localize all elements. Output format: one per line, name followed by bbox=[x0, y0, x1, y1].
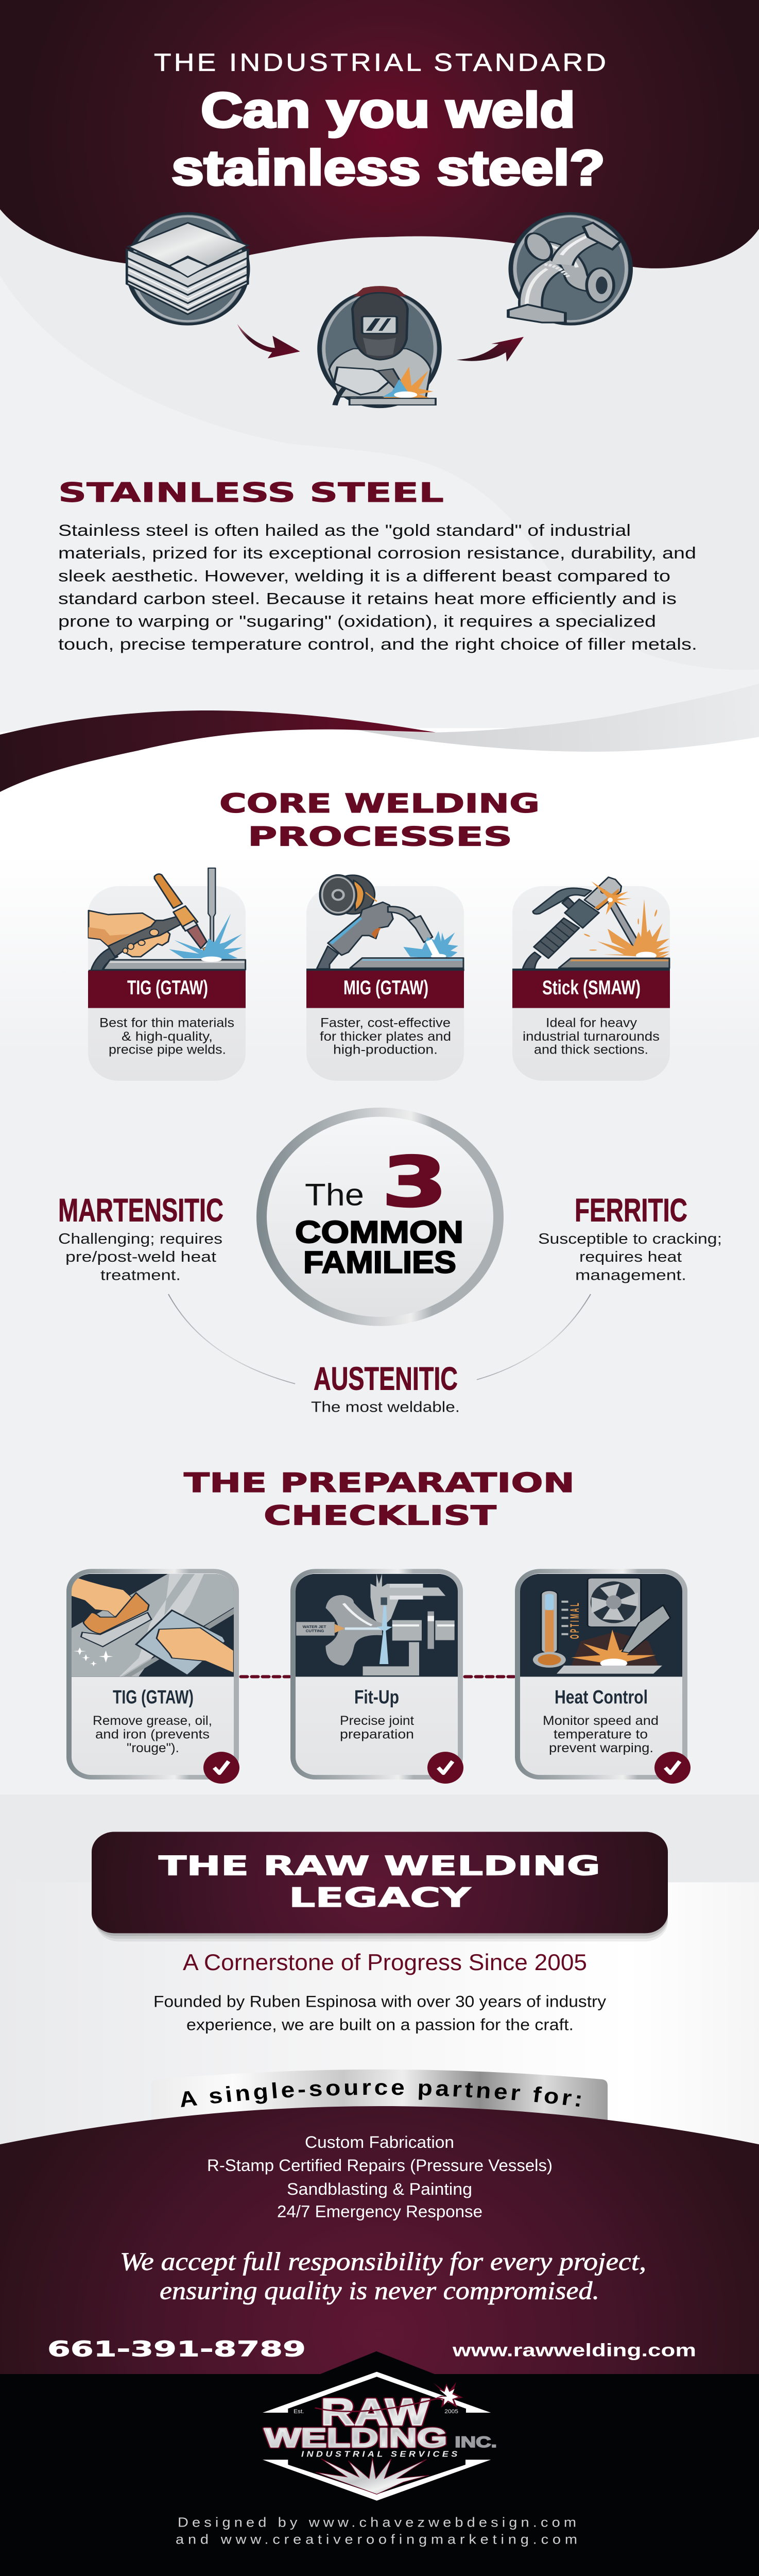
step description bbox=[543, 1714, 659, 1755]
illustration: water jet fit-up with caliper bbox=[294, 1573, 460, 1677]
description: TIG: Best for thin materials bbox=[99, 1015, 234, 1030]
icon: stick electrode holder bbox=[512, 877, 670, 971]
script tagline: We accept full responsibility for every project, bbox=[120, 2248, 646, 2276]
step description: Remove grease, oil, bbox=[93, 1714, 212, 1728]
illustration: water jet fit-up with caliper: WATER JET bbox=[303, 1625, 326, 1629]
icon: check badge bbox=[203, 1752, 239, 1784]
family: ferritic bbox=[538, 1192, 722, 1283]
panel: cleaning step card bbox=[69, 1571, 239, 1784]
logo: RAW Welding Inc: 2005 bbox=[444, 2409, 458, 2415]
description: Stick: industrial turnarounds bbox=[523, 1029, 660, 1044]
centre badge: the 3 common families bbox=[262, 1112, 498, 1321]
illustration: thermometer, fan and torch: OPTIMAL bbox=[567, 1603, 581, 1639]
step description: and iron (prevents bbox=[95, 1727, 210, 1741]
step description: preparation bbox=[340, 1727, 414, 1741]
family: austenitic: The most weldable. bbox=[311, 1399, 460, 1415]
panel: MIG process card: MIG (GTAW) bbox=[343, 976, 428, 998]
step description: "rouge"). bbox=[127, 1741, 179, 1755]
logo: RAW Welding Inc: INDUSTRIAL SERVICES bbox=[301, 2449, 458, 2459]
step description: prevent warping. bbox=[549, 1741, 653, 1755]
heading: the preparation checklist: CHECKLIST bbox=[264, 1500, 496, 1532]
centre badge: the 3 common families: The bbox=[305, 1177, 364, 1212]
logo: RAW Welding Inc bbox=[263, 2372, 497, 2501]
arc connector: left bbox=[168, 1294, 295, 1384]
heading: stainless steel: STAINLESS STEEL bbox=[58, 477, 444, 509]
legacy paragraph: Founded by Ruben Espinosa with over 30 years of industry bbox=[153, 1992, 606, 2011]
description: MIG: Faster, cost-effective bbox=[320, 1015, 451, 1030]
legacy title plate: THE RAW WELDING bbox=[159, 1851, 600, 1882]
main title: Can you weld bbox=[201, 82, 575, 138]
centre badge: the 3 common families: FAMILIES bbox=[303, 1245, 456, 1280]
illustration: cleaning with brush and cloth bbox=[70, 1573, 236, 1677]
label band: Stick bbox=[512, 971, 670, 1008]
black peak behind logo bbox=[319, 2351, 436, 2375]
designer credit bbox=[176, 2515, 577, 2547]
services list: 24/7 Emergency Response bbox=[277, 2202, 482, 2221]
heading: core welding processes bbox=[219, 788, 540, 852]
logo: RAW Welding Inc: Est. bbox=[294, 2409, 304, 2415]
panel: stainless steel intro bbox=[58, 477, 697, 653]
panel: TIG process card bbox=[88, 868, 246, 1081]
body paragraph: standard carbon steel. Because it retains heat more efficiently and is bbox=[58, 589, 677, 608]
description: MIG: high-production. bbox=[333, 1042, 438, 1057]
description: Stick: Ideal for heavy bbox=[546, 1015, 637, 1030]
icon: stack of steel plates bbox=[127, 213, 248, 324]
label band: MIG bbox=[306, 971, 464, 1008]
dashed connector: step 1 to 2 bbox=[241, 1675, 289, 1679]
icon: welder at work bbox=[319, 286, 440, 407]
body paragraph: sleek aesthetic. However, welding it is a different beast compared to bbox=[58, 567, 670, 585]
body paragraph bbox=[58, 521, 697, 653]
legacy subheading: A Cornerstone of Progress Since 2005 bbox=[183, 1950, 587, 1975]
centre badge: the 3 common families: 3 bbox=[382, 1142, 447, 1222]
legacy title plate bbox=[92, 1832, 668, 1941]
designer credit: and www.creativeroofingmarketing.com bbox=[176, 2532, 577, 2547]
eyebrow heading: THE INDUSTRIAL STANDARD bbox=[154, 48, 606, 76]
panel: TIG process card: TIG (GTAW) bbox=[127, 976, 208, 998]
family: martensitic: treatment. bbox=[100, 1267, 181, 1283]
icon: check badge bbox=[427, 1752, 463, 1784]
website: www.rawwelding.com bbox=[452, 2340, 696, 2360]
dashed connector: step 2 to 3 bbox=[465, 1675, 514, 1679]
family: austenitic: AUSTENITIC bbox=[314, 1361, 458, 1397]
family: martensitic: MARTENSITIC bbox=[58, 1192, 223, 1229]
icon: TIG torch and hand bbox=[89, 868, 246, 971]
description: MIG: for thicker plates and bbox=[320, 1029, 451, 1044]
step description bbox=[93, 1714, 212, 1755]
metallic ribbon: single-source partner bbox=[181, 2070, 608, 2120]
services list: Sandblasting & Painting bbox=[287, 2180, 472, 2199]
centre badge: the 3 common families: COMMON bbox=[295, 1215, 463, 1249]
body paragraph: materials, prized for its exceptional corrosion resistance, durability, and bbox=[58, 544, 696, 563]
description: Stick bbox=[523, 1015, 660, 1057]
family: ferritic: Susceptible to cracking; bbox=[538, 1231, 722, 1247]
metallic ribbon: single-source partner: A single-source partner for: bbox=[181, 2082, 581, 2107]
logo: RAW Welding Inc: RAW bbox=[321, 2392, 429, 2433]
family: ferritic: FERRITIC bbox=[575, 1192, 687, 1229]
description: TIG bbox=[99, 1015, 234, 1057]
hero banner shape bbox=[0, 0, 759, 268]
family: martensitic: pre/post-weld heat bbox=[65, 1249, 217, 1265]
step description: Monitor speed and bbox=[543, 1714, 659, 1728]
body paragraph: touch, precise temperature control, and the right choice of filler metals. bbox=[58, 635, 697, 653]
family: austenitic bbox=[311, 1361, 460, 1415]
body paragraph: Stainless steel is often hailed as the "gold standard" of industrial bbox=[58, 521, 631, 540]
divider swoosh: grey bbox=[349, 684, 759, 752]
panel: services dome bbox=[0, 2106, 759, 2374]
step title: Heat Control bbox=[555, 1687, 648, 1708]
label band: TIG bbox=[88, 971, 246, 1008]
heading: core welding processes: CORE WELDING bbox=[219, 788, 540, 819]
family: martensitic: Challenging; requires bbox=[58, 1231, 222, 1247]
description: MIG bbox=[320, 1015, 451, 1057]
body paragraph: prone to warping or "sugaring" (oxidation), it requires a specialized bbox=[58, 613, 656, 631]
arrow: plates to welder bbox=[237, 324, 300, 359]
panel: heat control step card bbox=[513, 1571, 691, 1784]
family: ferritic: management. bbox=[575, 1267, 686, 1283]
logo: RAW Welding Inc: RAW bbox=[321, 2392, 429, 2433]
icon: welded stainless pipes bbox=[508, 213, 631, 324]
services list: Custom Fabrication bbox=[305, 2133, 454, 2152]
step title: TIG (GTAW) bbox=[113, 1687, 194, 1708]
legacy paragraph: experience, we are built on a passion for the craft. bbox=[186, 2015, 574, 2034]
step title: Fit-Up bbox=[354, 1687, 399, 1708]
legacy paragraph bbox=[153, 1992, 606, 2034]
script tagline: ensuring quality is never compromised. bbox=[160, 2277, 599, 2305]
panel: Stick process card bbox=[512, 877, 670, 1081]
illustration: water jet fit-up with caliper: CUTTING bbox=[306, 1629, 324, 1633]
step description: temperature to bbox=[554, 1727, 648, 1741]
panel: fit-up step card bbox=[293, 1571, 463, 1784]
designer credit: Designed by www.chavezwebdesign.com bbox=[178, 2515, 576, 2530]
phone number: 661-391-8789 bbox=[47, 2337, 306, 2362]
main title bbox=[171, 82, 605, 195]
description: Stick: and thick sections. bbox=[534, 1042, 648, 1057]
divider swoosh: maroon bbox=[0, 710, 436, 792]
family: ferritic: requires heat bbox=[579, 1249, 682, 1265]
description: TIG: & high-quality, bbox=[122, 1029, 213, 1044]
main title: stainless steel? bbox=[171, 140, 605, 195]
script tagline bbox=[120, 2248, 646, 2305]
family: martensitic bbox=[58, 1192, 223, 1283]
panel: Stick process card: Stick (SMAW) bbox=[542, 976, 641, 998]
heading: core welding processes: PROCESSES bbox=[248, 821, 512, 852]
icon: MIG gun and spool bbox=[306, 875, 464, 971]
services list bbox=[207, 2133, 553, 2221]
heading: the preparation checklist: THE PREPARATION bbox=[184, 1467, 575, 1499]
illustration: thermometer, fan and torch bbox=[520, 1573, 682, 1676]
logo: RAW Welding Inc: INC. bbox=[455, 2434, 497, 2451]
step description: Precise joint bbox=[340, 1714, 415, 1728]
logo: RAW Welding Inc: WELDING bbox=[264, 2423, 447, 2453]
services list: R-Stamp Certified Repairs (Pressure Vessels) bbox=[207, 2156, 553, 2175]
icon: check badge bbox=[654, 1752, 691, 1784]
description: TIG: precise pipe welds. bbox=[109, 1042, 226, 1057]
panel: MIG process card bbox=[306, 875, 464, 1081]
heading: the preparation checklist bbox=[184, 1467, 575, 1532]
legacy title plate: LEGACY bbox=[289, 1882, 471, 1913]
arc connector: right bbox=[477, 1294, 591, 1380]
logo: RAW Welding Inc: WELDING bbox=[264, 2423, 447, 2453]
step description bbox=[340, 1714, 415, 1741]
arrow: welder to pipes bbox=[456, 337, 524, 362]
